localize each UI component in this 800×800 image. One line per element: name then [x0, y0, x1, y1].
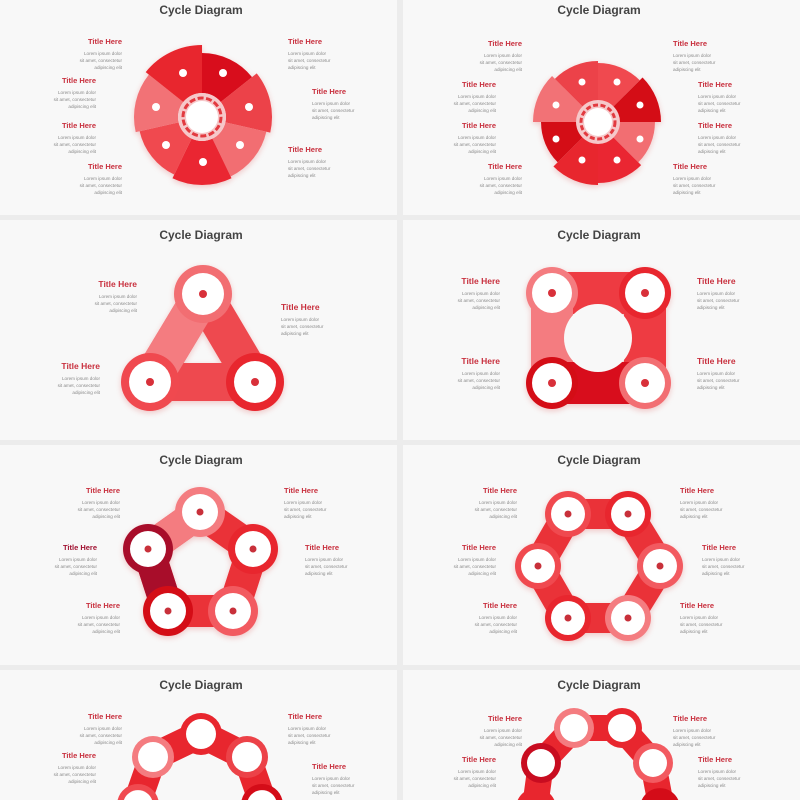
labels: Title Here [702, 543, 736, 552]
labels: Title Here [680, 486, 714, 495]
icons [552, 78, 644, 164]
panel: hexagon cycle [403, 445, 800, 665]
labels: Title Here [697, 356, 736, 366]
labels: Title Here [86, 486, 120, 495]
title: Cycle Diagram [159, 3, 243, 17]
panel: pie 7 [0, 0, 397, 215]
labels: Title Here [88, 712, 122, 721]
icons [548, 289, 649, 387]
labels right [288, 37, 355, 178]
labels right: Title Here [673, 162, 707, 171]
chain [526, 267, 671, 409]
chain [123, 487, 278, 636]
labels: Title Here [483, 486, 517, 495]
labels: Title Here [462, 755, 496, 764]
labels left [54, 37, 123, 195]
labels right: Title Here [288, 145, 322, 154]
center ring [576, 100, 620, 144]
labels left: Title Here [488, 162, 522, 171]
labels left: Title Here [62, 121, 96, 130]
labels right: Title Here [698, 121, 732, 130]
icons [152, 69, 253, 166]
panel: heptagon cycle [0, 670, 397, 800]
labels right: Title Here [312, 87, 346, 96]
labels: Title Here [63, 543, 97, 552]
chain [518, 708, 678, 800]
labels [58, 279, 324, 395]
center ring [178, 93, 226, 141]
labels: Title Here [483, 601, 517, 610]
labels: Title Here [673, 714, 707, 723]
chain [121, 265, 284, 411]
title: Cycle Diagram [557, 678, 641, 692]
labels: Title Here [461, 356, 500, 366]
labels left: Title Here [488, 39, 522, 48]
labels [454, 486, 745, 634]
panel: pie 8 [403, 0, 800, 215]
title: Cycle Diagram [557, 3, 641, 17]
labels: Title Here [488, 714, 522, 723]
icons [146, 290, 259, 386]
labels left: Title Here [462, 121, 496, 130]
labels left: Title Here [88, 37, 122, 46]
title: Cycle Diagram [557, 453, 641, 467]
labels right: Title Here [673, 39, 707, 48]
title: Cycle Diagram [557, 228, 641, 242]
labels left: Title Here [462, 80, 496, 89]
labels: Title Here [284, 486, 318, 495]
panel: triangle cycle [0, 220, 397, 440]
title: Cycle Diagram [159, 228, 243, 242]
labels: Title Here [305, 543, 339, 552]
labels [458, 276, 740, 390]
title: Cycle Diagram [159, 678, 243, 692]
labels: Title Here [288, 712, 322, 721]
labels [55, 486, 348, 634]
chain [515, 491, 683, 641]
labels right: Title Here [288, 37, 322, 46]
labels: Title Here [312, 762, 346, 771]
pie chart 7 segments [135, 50, 269, 184]
labels: Title Here [61, 361, 100, 371]
labels: Title Here [680, 601, 714, 610]
chain [118, 713, 282, 800]
labels left [454, 39, 523, 195]
labels: Title Here [697, 276, 736, 286]
labels: Title Here [462, 543, 496, 552]
labels left: Title Here [88, 162, 122, 171]
panel: octagon cycle [403, 670, 800, 800]
labels: Title Here [86, 601, 120, 610]
icons [534, 510, 664, 622]
panel: square cycle [403, 220, 800, 440]
panel: pentagon cycle [0, 445, 397, 665]
labels [454, 714, 741, 788]
labels [54, 712, 355, 795]
labels right: Title Here [698, 80, 732, 89]
labels: Title Here [281, 302, 320, 312]
pie chart 8 segments [539, 63, 657, 181]
labels: Title Here [461, 276, 500, 286]
labels left: Title Here [62, 76, 96, 85]
icons [144, 508, 256, 614]
labels: Title Here [62, 751, 96, 760]
labels: Title Here [698, 755, 732, 764]
labels right [673, 39, 741, 195]
title: Cycle Diagram [159, 453, 243, 467]
labels: Title Here [98, 279, 137, 289]
